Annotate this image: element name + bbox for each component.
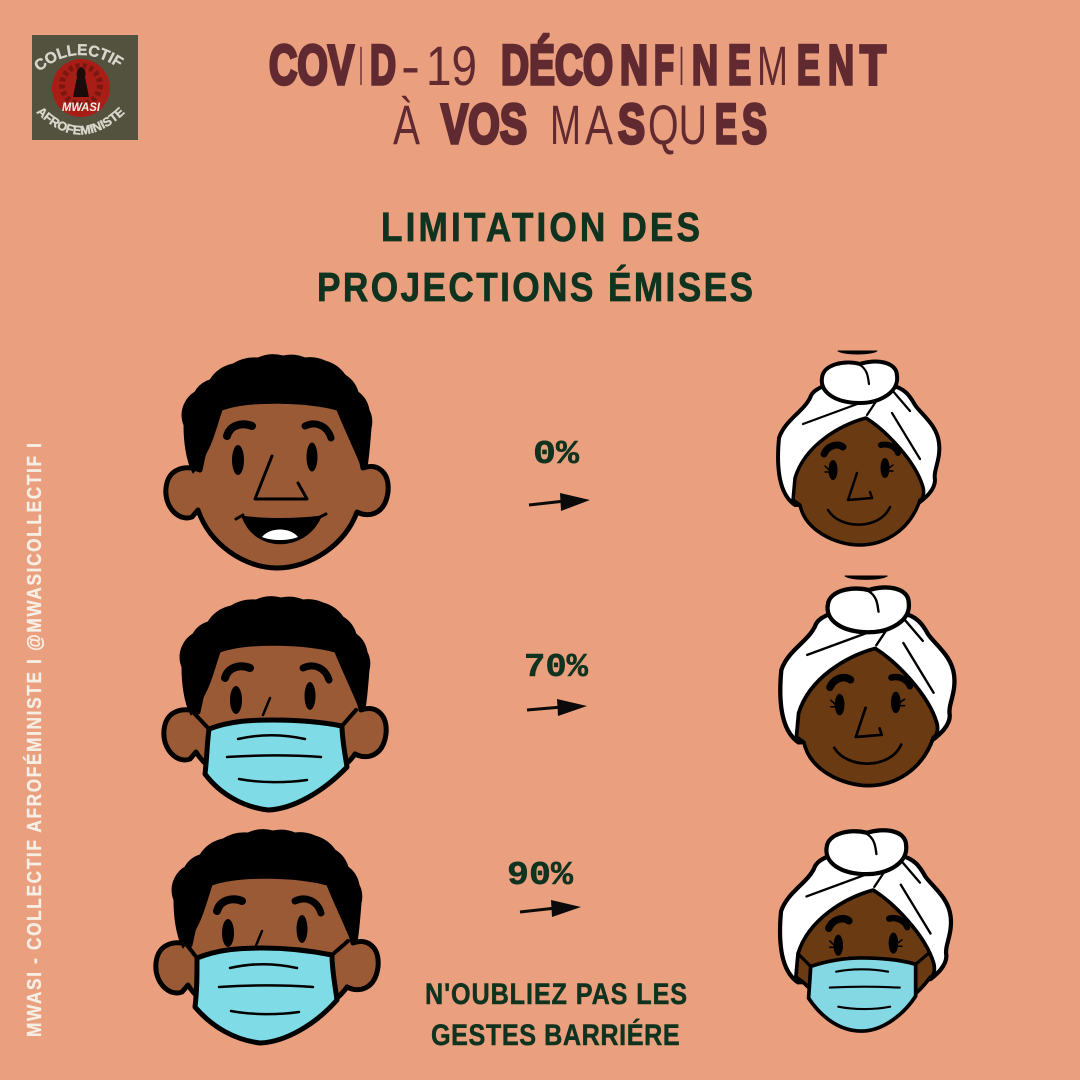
title: M — [757, 34, 788, 97]
woman without mask — [778, 351, 939, 545]
man with mask, 90% — [156, 830, 378, 1043]
title: E — [797, 33, 820, 96]
subtitle — [317, 205, 753, 311]
logo: collectif MWASI: COLLECTIF — [34, 44, 124, 70]
arrow 1 — [529, 493, 590, 511]
logo: collectif MWASI — [32, 35, 138, 140]
vertical side credit: MWASI - COLLECTIF AFROFÉMINISTE I @MWASICOLLECTIF I — [23, 443, 46, 1037]
title: À — [393, 93, 420, 156]
logo: collectif MWASI: AFROFEMINISTE — [36, 106, 126, 135]
subtitle: LIMITATION DES — [381, 205, 700, 251]
title: M — [550, 93, 581, 156]
woman with mask, 90% — [780, 830, 951, 1031]
title: E — [728, 33, 751, 96]
title: D — [370, 33, 396, 96]
title: S — [742, 92, 767, 155]
label: 0%: 0% — [533, 436, 579, 473]
title: A — [585, 93, 613, 156]
arrow 3 — [520, 900, 581, 917]
title: E — [715, 92, 737, 155]
reminder text — [425, 977, 687, 1051]
title: F — [654, 33, 674, 96]
title: COV — [269, 33, 354, 96]
label: 90%: 90% — [507, 857, 573, 894]
title: S — [618, 92, 645, 155]
title: DÉCO — [501, 33, 613, 96]
title: I — [679, 34, 684, 97]
logo: collectif MWASI: MWASI — [62, 100, 101, 114]
title: VOS — [441, 92, 527, 155]
woman, 70% — [780, 576, 954, 786]
reminder text: GESTES BARRIÉRE — [431, 1018, 680, 1051]
title: - — [401, 34, 420, 97]
title: T — [860, 33, 886, 96]
title — [269, 33, 886, 156]
reminder text: N'OUBLIEZ PAS LES — [425, 977, 687, 1010]
title: N — [692, 33, 718, 96]
title: N — [828, 33, 854, 96]
title: 19 — [426, 34, 477, 97]
man without mask — [166, 355, 388, 568]
arrow 2 — [527, 699, 587, 716]
title: QU — [648, 93, 707, 156]
title: N — [620, 33, 648, 96]
label: 70%: 70% — [524, 649, 588, 686]
man with mask, 70% — [164, 597, 386, 810]
title: I — [359, 34, 363, 97]
subtitle: PROJECTIONS ÉMISES — [317, 263, 753, 311]
